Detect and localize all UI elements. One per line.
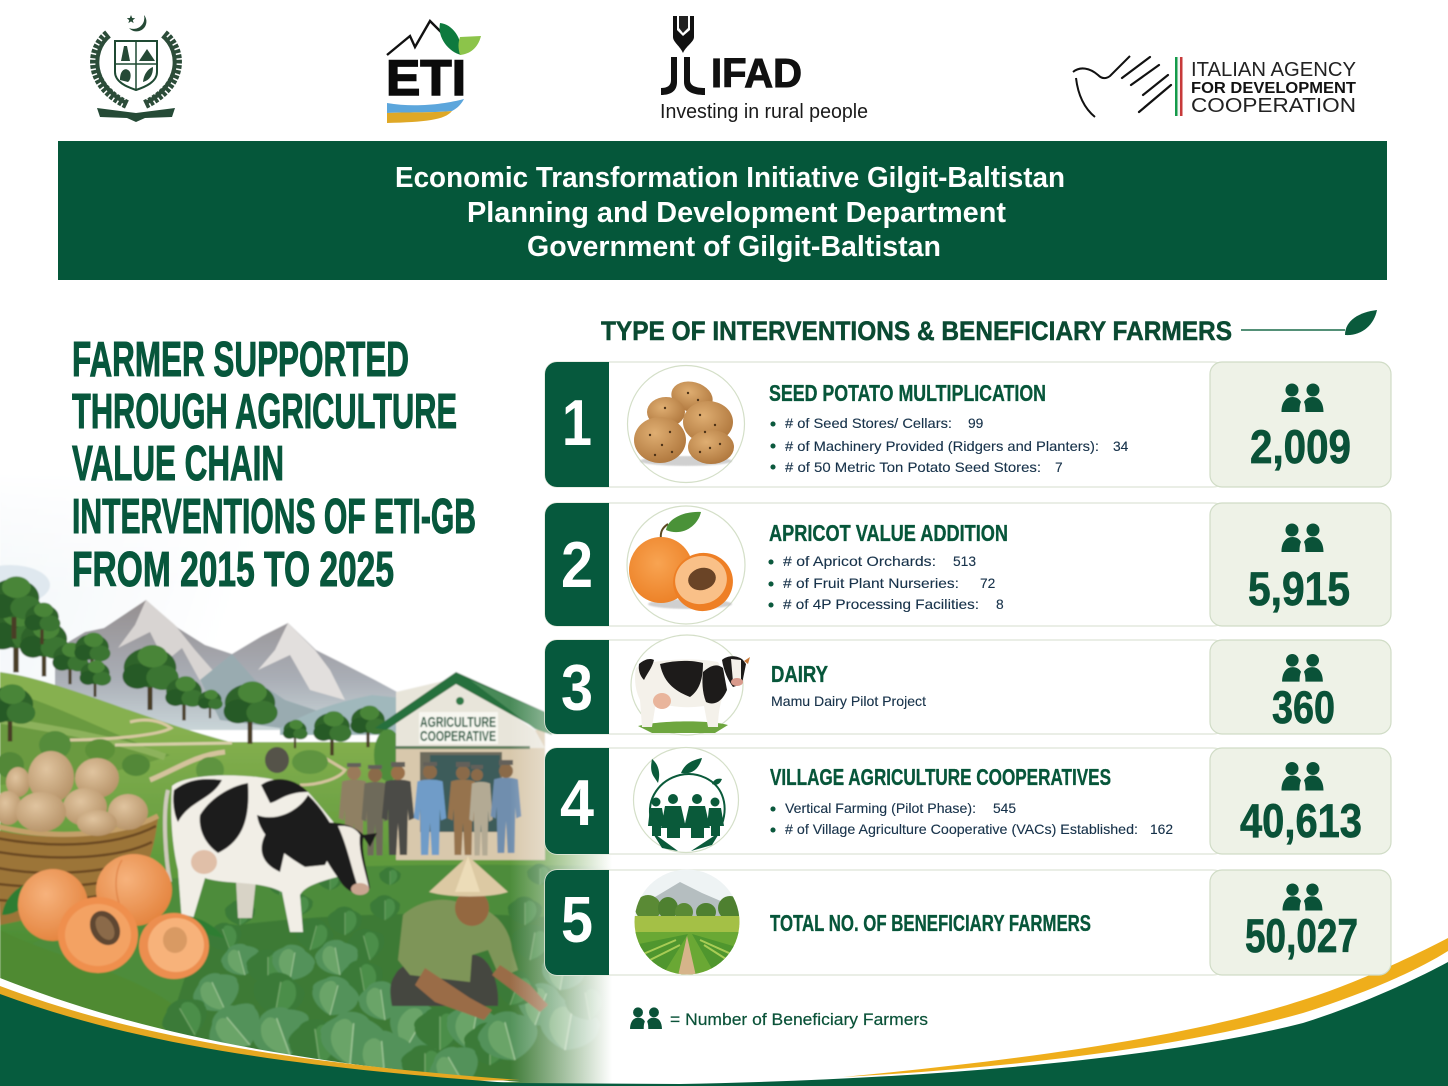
icon: dairy cow xyxy=(631,635,750,735)
list: potato outputs: 34 xyxy=(1113,439,1129,454)
logo: Italian Agency for Development Cooperation xyxy=(1073,56,1356,117)
logo: IFAD xyxy=(660,16,868,123)
stat box: 40,613: 40,613 xyxy=(1240,794,1362,847)
panel: row 5 total beneficiary farmers xyxy=(545,869,1391,977)
main title: INTERVENTIONS OF ETI-GB xyxy=(72,490,476,544)
farmer xyxy=(390,955,498,1006)
panel: row 2 apricot value addition xyxy=(545,503,1391,626)
field foliage xyxy=(168,864,566,909)
stat box: 360: 360 xyxy=(1272,682,1335,733)
number badge 5 xyxy=(545,870,609,975)
main title: FROM 2015 TO 2025 xyxy=(72,543,394,597)
number badge 5: 5 xyxy=(561,883,593,956)
panel: row 3 dairy xyxy=(545,635,1391,735)
icon: apricots xyxy=(627,506,745,624)
people xyxy=(338,779,368,834)
illustration: farm landscape: AGRICULTURE xyxy=(420,714,496,731)
stat box: 2,009 xyxy=(1210,362,1391,487)
text: mamu dairy pilot project: Mamu Dairy Pilot Project xyxy=(771,694,926,709)
stat box: 360 xyxy=(1210,640,1391,734)
building xyxy=(396,730,545,860)
logo: Italian Agency for Development Cooperation: ITALIAN AGENCY xyxy=(1191,59,1356,81)
main title: VALUE CHAIN xyxy=(72,437,284,491)
legend: = Number of Beneficiary Farmers xyxy=(670,1010,928,1029)
heading: total beneficiary farmers: TOTAL NO. OF BENEFICIARY FARMERS xyxy=(770,910,1091,936)
header banner: Planning and Development Department xyxy=(467,197,1007,229)
list: potato outputs: 99 xyxy=(968,416,984,431)
heading: apricot value addition: APRICOT VALUE ADDITION xyxy=(769,520,1008,546)
list: potato outputs xyxy=(770,416,1129,475)
list: cooperative outputs: 162 xyxy=(1150,822,1173,837)
icon: community circle xyxy=(634,748,738,852)
section heading: TYPE OF INTERVENTIONS & BENEFICIARY FARMERS xyxy=(601,316,1232,346)
list: apricot outputs: # of 4P Processing Facilities: xyxy=(783,597,979,612)
list: apricot outputs: 8 xyxy=(996,597,1004,612)
header banner xyxy=(58,141,1387,280)
main title: FARMER SUPPORTED xyxy=(72,333,409,387)
logo: Italian Agency for Development Cooperation: FOR DEVELOPMENT xyxy=(1191,80,1356,97)
list: potato outputs: # of Seed Stores/ Cellars: xyxy=(785,416,952,431)
stat box: 5,915 xyxy=(1210,503,1391,626)
logo: ETI xyxy=(386,21,481,123)
stat box: 50,027: 50,027 xyxy=(1245,909,1358,962)
logo: IFAD: IFAD xyxy=(711,50,802,96)
icon: potatoes xyxy=(628,366,744,482)
list: apricot outputs: 72 xyxy=(980,576,995,591)
heading: seed potato multiplication: SEED POTATO MULTIPLICATION xyxy=(769,380,1046,406)
number badge 4 xyxy=(545,748,609,854)
list: cooperative outputs xyxy=(770,801,1173,837)
list: potato outputs: # of Machinery Provided (Ridgers and Planters): xyxy=(785,439,1099,454)
logo: IFAD: Investing in rural people xyxy=(660,101,868,123)
number badge 3: 3 xyxy=(561,651,593,724)
logo: Government of Pakistan emblem xyxy=(95,15,177,122)
main title xyxy=(72,333,476,597)
list: cooperative outputs: Vertical Farming (Pilot Phase): xyxy=(785,801,976,816)
stat box: 50,027 xyxy=(1210,870,1391,975)
number badge 2 xyxy=(545,503,609,626)
list: cooperative outputs: # of Village Agriculture Cooperative (VACs) Established: xyxy=(785,822,1138,837)
panel: row 1 seed potato multiplication xyxy=(545,362,1391,487)
number badge 3 xyxy=(545,640,609,734)
number badge 1 xyxy=(545,362,609,487)
logo: ETI: ETI xyxy=(386,50,466,106)
list: apricot outputs xyxy=(768,554,1004,612)
list: potato outputs: # of 50 Metric Ton Potato Seed Stores: xyxy=(785,460,1041,475)
basket and potatoes xyxy=(0,818,158,925)
illustration: farm landscape: COOPERATIVE xyxy=(420,728,496,745)
number badge 2: 2 xyxy=(561,528,593,601)
logo: Italian Agency for Development Cooperation: COOPERATION xyxy=(1191,95,1356,117)
panel: row 4 village agriculture cooperatives xyxy=(545,748,1391,854)
illustration: farm landscape xyxy=(0,561,608,1084)
main title: THROUGH AGRICULTURE xyxy=(72,385,457,439)
icon: green field landscape xyxy=(634,869,745,977)
stat box: 2,009: 2,009 xyxy=(1250,420,1351,473)
apricots xyxy=(2,885,24,916)
header banner: Economic Transformation Initiative Gilgit-Baltistan xyxy=(395,162,1065,194)
number badge 4: 4 xyxy=(560,766,594,839)
list: apricot outputs: 513 xyxy=(953,554,976,569)
stat box: 40,613 xyxy=(1210,748,1391,854)
list: cooperative outputs: 545 xyxy=(993,801,1016,816)
bottom swoosh band xyxy=(0,938,1448,1086)
stat box: 5,915: 5,915 xyxy=(1248,562,1350,615)
list: apricot outputs: # of Fruit Plant Nurseries: xyxy=(783,576,959,591)
cow xyxy=(235,882,256,920)
heading: dairy: DAIRY xyxy=(771,661,828,687)
header banner: Government of Gilgit-Baltistan xyxy=(527,231,941,263)
number badge 1: 1 xyxy=(562,386,592,459)
list: potato outputs: 7 xyxy=(1055,460,1063,475)
list: apricot outputs: # of Apricot Orchards: xyxy=(783,554,936,569)
heading: village agriculture cooperatives: VILLAGE AGRICULTURE COOPERATIVES xyxy=(770,764,1111,790)
